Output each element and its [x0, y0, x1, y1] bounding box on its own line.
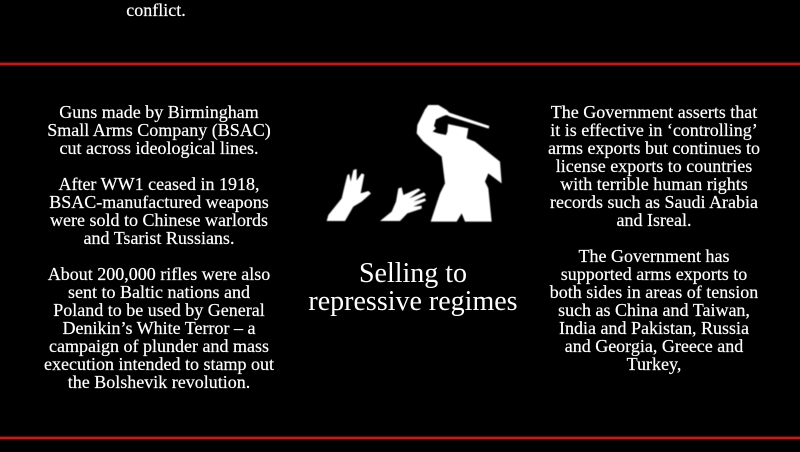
text block: left column, Birmingham Small Arms: sent to Baltic nations and [68, 282, 250, 302]
text block: right column, Government arms exports: and Isreal. [617, 210, 691, 230]
text block: right column, Government arms exports: it is effective in ‘controlling’ [550, 120, 758, 140]
text block: left column, Birmingham Small Arms: execution intended to stamp out [44, 354, 274, 374]
text block: left column, Birmingham Small Arms: After WW1 ceased in 1918, [58, 174, 260, 194]
bottom red divider [0, 437, 800, 439]
text block: right column, Government arms exports: and Georgia, Greece and [565, 336, 743, 356]
text block: left column, Birmingham Small Arms: and Tsarist Russians. [84, 228, 234, 248]
text block: right column, Government arms exports: license exports to countries [556, 156, 752, 176]
text block: right column, Government arms exports: both sides in areas of tension [550, 282, 758, 302]
text block: left column, Birmingham Small Arms: Denikin’s White Terror – a [62, 318, 256, 338]
text block: right column, Government arms exports: The Government asserts that [551, 102, 757, 122]
text block: right column, Government arms exports [548, 102, 760, 374]
text block: left column, Birmingham Small Arms: About 200,000 rifles were also [48, 264, 270, 284]
icon: left raised hand [327, 169, 371, 221]
icon: police officer silhouette [417, 105, 502, 222]
text block: right column, Government arms exports: supported arms exports to [561, 264, 747, 284]
text block: right column, Government arms exports: with terrible human rights [560, 174, 748, 194]
text block: left column, Birmingham Small Arms: Guns made by Birmingham [59, 102, 259, 122]
text block: right column, Government arms exports: arms exports but continues to [548, 138, 760, 158]
top red divider [0, 63, 800, 65]
text block: right column, Government arms exports: Turkey, [627, 354, 681, 374]
text block: left column, Birmingham Small Arms: cut across ideological lines. [60, 138, 258, 158]
text block: left column, Birmingham Small Arms: campaign of plunder and mass [49, 336, 269, 356]
text block: left column, Birmingham Small Arms: Poland to be used by General [53, 300, 265, 320]
heading: Selling to repressive regimes: Selling to [359, 258, 467, 289]
top text fragment: left column: conflict. [126, 0, 186, 20]
text block: right column, Government arms exports: India and Pakistan, Russia [559, 318, 749, 338]
text block: right column, Government arms exports: such as China and Taiwan, [558, 300, 750, 320]
text block: left column, Birmingham Small Arms: the Bolshevik revolution. [68, 372, 250, 392]
text block: right column, Government arms exports: records such as Saudi Arabia [550, 192, 758, 212]
heading: Selling to repressive regimes [308, 258, 518, 317]
icon: police officer with baton over raised hands [326, 104, 502, 222]
text block: left column, Birmingham Small Arms [44, 102, 274, 392]
text block: left column, Birmingham Small Arms: were sold to Chinese warlords [50, 210, 268, 230]
text block: right column, Government arms exports: The Government has [579, 246, 729, 266]
icon: right raised hand [380, 187, 426, 221]
text block: left column, Birmingham Small Arms: Small Arms Company (BSAC) [47, 120, 271, 140]
heading: Selling to repressive regimes: repressive regimes [308, 286, 518, 317]
text block: left column, Birmingham Small Arms: BSAC-manufactured weapons [49, 192, 269, 212]
